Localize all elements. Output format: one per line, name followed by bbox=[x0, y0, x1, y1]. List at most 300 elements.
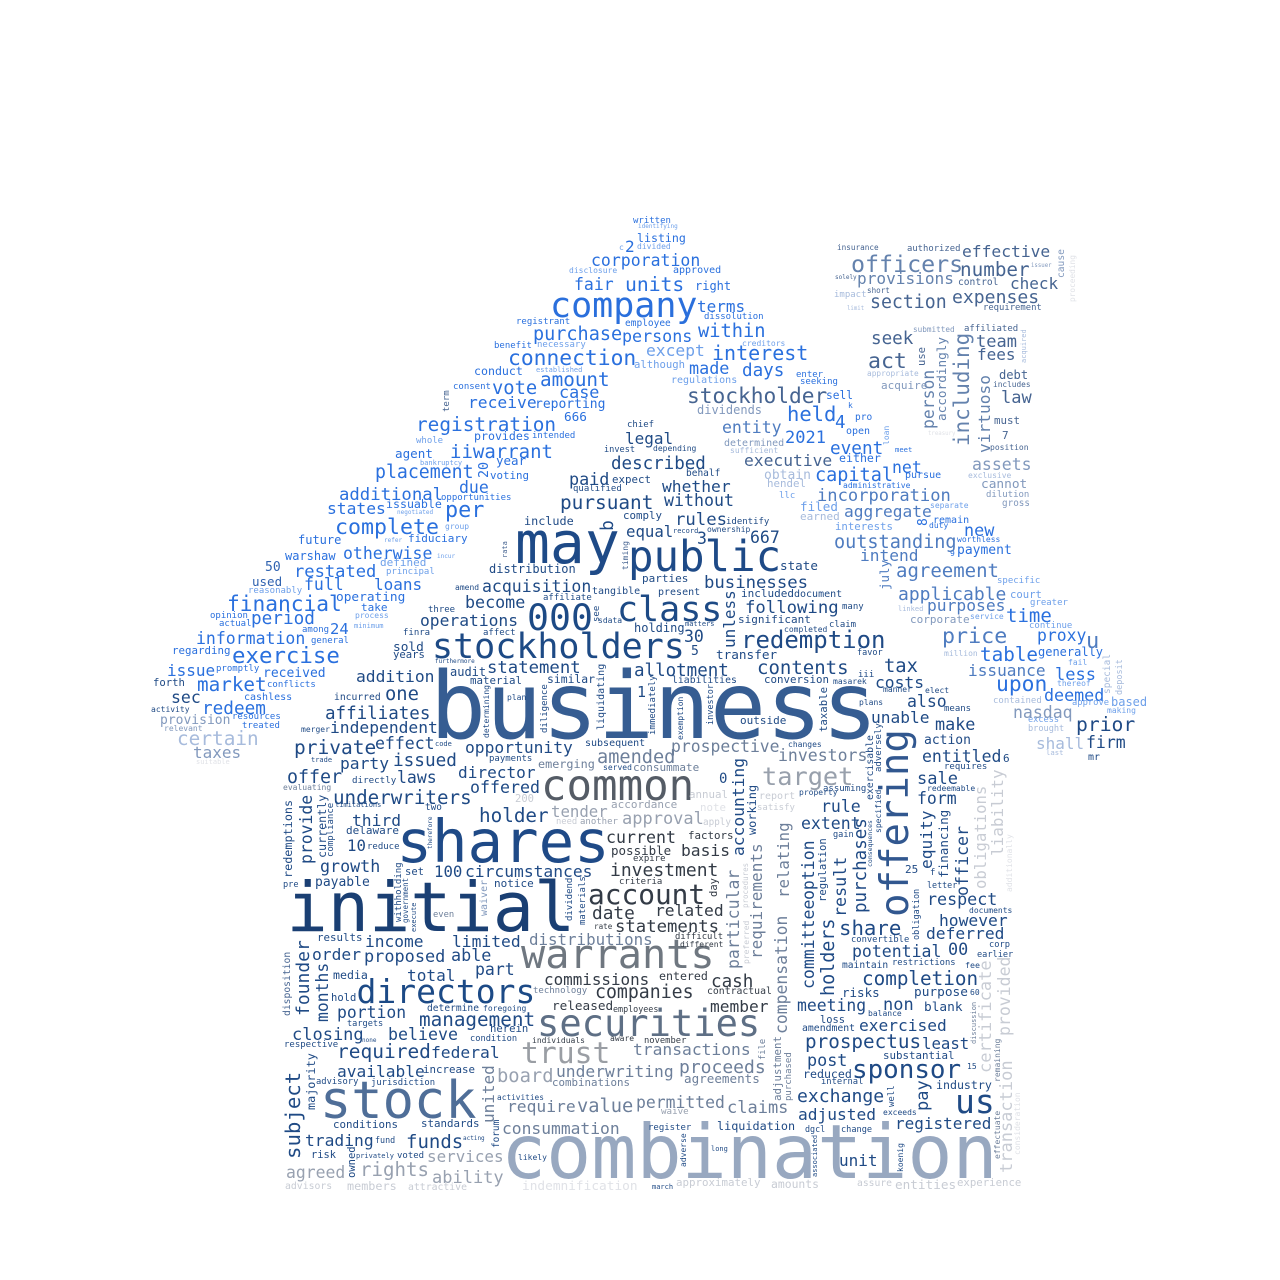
words: pale bright blue small terms: fail bbox=[1068, 658, 1087, 667]
words: bright blue roof left: connection bbox=[508, 346, 636, 371]
words: bright blue roof left: listing bbox=[637, 231, 686, 245]
words: navy centre and lower body: fund bbox=[375, 1135, 395, 1145]
words: top right block slate blue: use bbox=[916, 347, 928, 366]
words: navy centre and lower body: advisory bbox=[316, 1077, 358, 1087]
words: navy centre and lower body: non bbox=[883, 995, 914, 1015]
large word: common: common bbox=[541, 761, 694, 810]
words: slate light grey-blue: issuer bbox=[1031, 263, 1052, 269]
words: navy centre and lower body: financing bbox=[936, 810, 951, 878]
words: pale grey fringes: amounts bbox=[771, 1177, 819, 1191]
words: slate light grey-blue: assets bbox=[972, 455, 1032, 474]
words: navy centre and lower body: subsequent bbox=[585, 738, 645, 749]
words: bright blue roof left: open bbox=[846, 426, 870, 437]
words: pale grey fringes: obligations bbox=[972, 786, 990, 889]
words: navy centre and lower body: manner bbox=[883, 685, 912, 694]
words: bright blue roof left: among bbox=[302, 625, 329, 635]
words: bright blue roof left: operating bbox=[336, 590, 405, 605]
words: navy centre and lower body: portion bbox=[337, 1003, 406, 1022]
large word: offering: offering bbox=[873, 729, 918, 917]
words: navy centre and lower body: notice bbox=[494, 877, 534, 890]
words: navy centre and lower body: activities bbox=[497, 1093, 544, 1102]
words: navy centre and lower body: firm bbox=[1086, 733, 1126, 752]
words: bright blue roof left: voting bbox=[490, 469, 529, 482]
words: bright blue roof left: units bbox=[625, 273, 684, 296]
words: bright blue roof left: worthless bbox=[957, 535, 1001, 544]
words: navy centre and lower body: well bbox=[887, 1085, 897, 1107]
words: navy centre and lower body: majority bbox=[304, 1053, 318, 1110]
words: navy centre and lower body: 10 bbox=[347, 836, 366, 855]
words: navy centre and lower body: party bbox=[340, 754, 389, 773]
words: mid grey lower body: accordance bbox=[611, 798, 677, 811]
words: mid grey lower body: ability bbox=[432, 1168, 504, 1188]
words: pale bright blue small terms: excess bbox=[1028, 715, 1059, 725]
words: bright blue roof left: receive bbox=[468, 393, 537, 412]
words: bright blue roof left: event bbox=[830, 439, 883, 459]
large word: initial: initial bbox=[286, 868, 575, 948]
words: pale grey fringes: approximately bbox=[676, 1176, 761, 1189]
words: navy centre and lower body: balance bbox=[868, 1009, 902, 1018]
words: pale bright blue small terms: identifying bbox=[638, 223, 678, 230]
largest word: business: business bbox=[430, 652, 878, 760]
words: pale blue accents: sufficient bbox=[730, 446, 778, 455]
words: navy centre and lower body: immediately bbox=[648, 675, 658, 735]
words: top right block slate blue: position bbox=[990, 443, 1029, 452]
words: navy centre and lower body: pay bbox=[913, 1080, 933, 1111]
words: navy centre and lower body: adjusted bbox=[798, 1105, 876, 1124]
words: bright blue roof left: additional bbox=[339, 485, 443, 505]
words: navy centre and lower body: march bbox=[652, 1183, 673, 1191]
words: slate light grey-blue: gross bbox=[1002, 498, 1030, 509]
words: slate grey lower centre: combinations bbox=[552, 1076, 630, 1089]
words: pale blue accents: deposit bbox=[1115, 659, 1125, 695]
words: pale grey fringes: procedures bbox=[741, 863, 750, 908]
words: dark charcoal centre: basis bbox=[681, 841, 730, 860]
words: navy centre and lower body: record bbox=[673, 527, 698, 535]
words: bright blue roof left: take bbox=[361, 601, 388, 614]
words: pale bright blue small terms: refer bbox=[384, 537, 402, 544]
words: navy centre and lower body: none bbox=[362, 1037, 377, 1044]
words: right wing mid blue: issuance bbox=[968, 661, 1046, 680]
words: mid grey lower body: tender bbox=[551, 802, 608, 821]
words: navy centre and lower body: behalf bbox=[686, 468, 720, 479]
words: navy centre and lower body: growth bbox=[320, 856, 380, 876]
words: navy centre and lower body: internal bbox=[821, 1077, 863, 1087]
words: navy centre and lower body: circumstances bbox=[465, 862, 592, 881]
words: navy centre and lower body: potential bbox=[852, 942, 941, 961]
words: navy centre and lower body: 6 bbox=[1003, 752, 1010, 765]
words: top right block slate blue: seek bbox=[871, 329, 914, 349]
large word: stockholders: stockholders bbox=[432, 627, 685, 667]
words: slate grey lower centre: permitted bbox=[636, 1093, 725, 1112]
words: navy centre and lower body: plan bbox=[507, 693, 526, 702]
words: bright blue roof left: seeking bbox=[800, 377, 838, 387]
words: mid grey lower body: services bbox=[427, 1147, 504, 1166]
words: navy centre and lower body: affect bbox=[483, 628, 516, 638]
words: slate light grey-blue: provision bbox=[160, 713, 230, 728]
words: navy centre and lower body: f bbox=[930, 868, 935, 878]
words: navy centre and lower body: years bbox=[393, 649, 425, 661]
words: bright blue roof left: table bbox=[980, 643, 1038, 666]
words: navy centre and lower body: exemption bbox=[676, 696, 685, 740]
words: navy centre and lower body: documents bbox=[969, 906, 1013, 915]
words: navy centre and lower body: code bbox=[435, 740, 452, 748]
words: navy centre and lower body: expect bbox=[612, 473, 651, 486]
large word: directors: directors bbox=[356, 972, 535, 1011]
words: slate light grey-blue: determined bbox=[724, 438, 784, 449]
words: bright blue roof left: consent bbox=[453, 382, 491, 392]
words: slate grey lower centre: investors bbox=[778, 746, 867, 765]
words: bright blue roof left: 20 bbox=[477, 462, 492, 478]
words: navy centre and lower body: increase bbox=[423, 1063, 475, 1076]
words: pale bright blue small terms: minimum bbox=[354, 622, 384, 630]
words: pale blue accents: acquired bbox=[1020, 329, 1028, 363]
words: bright blue roof left: redeem bbox=[202, 699, 266, 719]
words: pale bright blue small terms: bankruptcy bbox=[420, 459, 462, 467]
large word: target: target bbox=[762, 762, 853, 791]
words: navy centre and lower body: liquidation bbox=[717, 1119, 795, 1133]
words: slate light grey-blue: acquire bbox=[881, 379, 927, 392]
words: navy centre and lower body: required bbox=[337, 1040, 431, 1063]
words: navy centre and lower body: make bbox=[935, 714, 975, 734]
words: bright blue roof left: pro bbox=[855, 412, 872, 423]
words: bright blue roof left: placement bbox=[375, 462, 474, 483]
words: top right block slate blue: must bbox=[994, 414, 1020, 427]
words: bright blue roof left: duty bbox=[929, 521, 948, 530]
words: slate light grey-blue: cause bbox=[1056, 249, 1067, 278]
words: bright blue roof left: terms bbox=[697, 297, 745, 316]
words: navy centre and lower body: furthermore bbox=[435, 658, 475, 665]
words: navy centre and lower body: fee bbox=[965, 960, 980, 970]
words: pale blue accents: appropriate bbox=[867, 369, 919, 378]
words: dark charcoal centre: individuals bbox=[532, 1036, 585, 1045]
words: pale blue accents: limit bbox=[847, 306, 864, 312]
words: dark charcoal centre: aware bbox=[610, 1034, 634, 1043]
words: bright blue roof left: time bbox=[1006, 605, 1052, 627]
words: navy centre and lower body: forth bbox=[153, 677, 185, 689]
words: navy centre and lower body: obligation bbox=[912, 889, 922, 940]
words: navy centre and lower body: include bbox=[524, 514, 574, 528]
words: right wing mid blue: aggregate bbox=[844, 502, 932, 521]
words: bright blue roof left: purchase bbox=[533, 324, 622, 345]
words: pale grey fringes: certificate bbox=[976, 960, 996, 1073]
words: pale bright blue small terms: defined bbox=[380, 556, 426, 569]
words: slate grey lower centre: effectuate bbox=[993, 1111, 1002, 1159]
words: slate grey lower centre: prospective bbox=[671, 737, 780, 756]
words: navy centre and lower body: affiliate bbox=[543, 593, 592, 603]
words: bright blue roof left: regarding bbox=[172, 644, 231, 657]
words: bright blue roof left: held bbox=[787, 402, 836, 426]
words: navy centre and lower body: risk bbox=[311, 1149, 337, 1161]
words: bright blue roof left: loans bbox=[374, 575, 422, 594]
words: navy centre and lower body: elect bbox=[925, 686, 949, 695]
words: navy centre and lower body: action bbox=[924, 733, 971, 748]
words: right wing mid blue: purposes bbox=[927, 596, 1005, 615]
words: navy centre and lower body: however bbox=[939, 911, 1008, 930]
words: pale bright blue small terms: group bbox=[445, 522, 469, 531]
words: navy centre and lower body: accounting bbox=[729, 758, 748, 856]
words: navy centre and lower body: proposed bbox=[364, 946, 445, 966]
words: navy centre and lower body: change bbox=[841, 1125, 872, 1135]
words: navy centre and lower body: trading bbox=[305, 1131, 374, 1150]
words: navy centre and lower body: likely bbox=[518, 1153, 547, 1162]
words: navy centre and lower body: post bbox=[807, 1050, 847, 1070]
words: faintest fringe: proceeding bbox=[1068, 255, 1077, 302]
words: navy centre and lower body: founder bbox=[293, 940, 314, 1016]
words: navy centre and lower body: convertible bbox=[851, 935, 909, 945]
words: navy centre and lower body: 0 bbox=[719, 771, 727, 787]
words: bright blue roof left: either bbox=[839, 451, 881, 465]
words: faintest fringe bbox=[196, 255, 1077, 1194]
words: mid grey lower body: rights bbox=[360, 1158, 429, 1181]
words: bright blue roof left: provides bbox=[474, 429, 530, 443]
words: navy centre and lower body: statement bbox=[487, 658, 581, 678]
words: faintest fringe: note bbox=[700, 801, 726, 814]
words: slate grey lower centre: evaluating bbox=[283, 783, 331, 792]
words: navy centre and lower body: conversion bbox=[764, 673, 829, 686]
words: pale grey fringes: entities bbox=[895, 1177, 956, 1192]
words: navy centre and lower body: conditions bbox=[333, 1118, 398, 1131]
words: pale grey fringes: advisors bbox=[285, 1181, 332, 1192]
words: navy centre and lower body: pre bbox=[283, 880, 299, 890]
words: pale bright blue small terms: thereof bbox=[1057, 679, 1091, 688]
words: pale blue accents: linked bbox=[898, 605, 923, 613]
words: navy centre and lower body: form bbox=[917, 789, 957, 808]
words: navy centre and lower body bbox=[151, 420, 1135, 1191]
words: bright blue roof left: persons bbox=[622, 326, 692, 346]
words: pale bright blue small terms: principal bbox=[386, 567, 435, 577]
words: navy centre and lower body: one bbox=[385, 684, 419, 705]
words: dark charcoal centre: current bbox=[606, 828, 676, 847]
words: navy centre and lower body: contents bbox=[757, 657, 849, 679]
words: navy centre and lower body: restrictions bbox=[892, 958, 956, 968]
words: navy centre and lower body: herein bbox=[490, 1023, 528, 1035]
words: bright blue roof left: information bbox=[196, 629, 305, 648]
words: navy centre and lower body: outside bbox=[740, 714, 786, 727]
words: navy centre and lower body: amendment bbox=[802, 1023, 855, 1034]
words: pale grey fringes: attractive bbox=[408, 1182, 467, 1193]
words: bright blue roof left: written bbox=[633, 216, 671, 226]
words: navy centre and lower body: whether bbox=[662, 477, 731, 496]
large word: account: account bbox=[588, 878, 705, 911]
words: bright blue roof left: future bbox=[298, 533, 341, 547]
words: bright blue roof left: deemed bbox=[1044, 685, 1104, 705]
words: dark charcoal centre: cash bbox=[711, 972, 753, 992]
words: slate grey lower centre bbox=[283, 737, 1002, 1159]
words: navy centre and lower body: funds bbox=[406, 1131, 463, 1153]
words: navy centre and lower body: finra bbox=[403, 628, 430, 638]
words: pale bright blue small terms: reasonably bbox=[248, 586, 303, 596]
words: pale bright blue small terms: based bbox=[1111, 695, 1147, 709]
large word: 000: 000 bbox=[527, 596, 593, 639]
words: navy centre and lower body: payable bbox=[315, 875, 370, 890]
words: dark charcoal centre: expire bbox=[633, 854, 666, 864]
words: pale blue accents: impact bbox=[834, 290, 867, 300]
words: pale blue accents: special bbox=[1102, 654, 1113, 694]
words: bright blue roof left: otherwise bbox=[343, 544, 432, 563]
words: navy centre and lower body: property bbox=[799, 788, 838, 797]
words: navy centre and lower body: determine bbox=[427, 1003, 479, 1014]
words: bright blue roof left: interest bbox=[712, 341, 808, 365]
words: navy centre and lower body: corp bbox=[989, 940, 1010, 950]
words: navy centre and lower body: result bbox=[830, 857, 850, 917]
words: top right block slate blue: effective bbox=[962, 242, 1050, 261]
words: pale grey fringes: need bbox=[556, 817, 577, 827]
words: navy centre and lower body: become bbox=[465, 592, 525, 612]
words: bright blue roof left: 2021 bbox=[785, 428, 826, 448]
words: top right block slate blue: authorized bbox=[907, 244, 960, 254]
words: pale bright blue small terms: except bbox=[646, 341, 705, 360]
words: slate light grey-blue: relevant bbox=[164, 724, 203, 733]
words: top right block slate blue bbox=[282, 242, 1059, 1016]
words: top right block slate blue: short bbox=[867, 286, 890, 295]
words: navy centre and lower body: prior bbox=[1076, 713, 1135, 736]
words: navy centre and lower body: currently bbox=[315, 795, 329, 858]
words: navy centre and lower body: owned bbox=[346, 1146, 358, 1178]
large word: class: class bbox=[617, 590, 722, 630]
words: navy centre and lower body: present bbox=[658, 587, 700, 598]
words: navy centre and lower body: assuming bbox=[823, 784, 866, 794]
words: navy centre and lower body: consequences bbox=[866, 820, 874, 867]
words: slate grey lower centre: compensation bbox=[772, 916, 791, 1034]
words: slate grey lower centre: emerging bbox=[538, 757, 595, 771]
words: navy centre and lower body: document bbox=[794, 589, 842, 600]
words: navy centre and lower body: register bbox=[648, 1123, 692, 1133]
words: navy centre and lower body: holding bbox=[634, 621, 685, 635]
words: mid grey lower body: waive bbox=[661, 1106, 689, 1117]
words: navy centre and lower body: extent bbox=[801, 814, 861, 833]
words: top right block slate blue: stockholder bbox=[687, 383, 827, 408]
words: navy centre and lower body: income bbox=[365, 932, 423, 951]
words: top right block slate blue: 7 bbox=[1002, 429, 1009, 442]
words: top right block slate blue: disposition bbox=[282, 952, 293, 1016]
words: navy centre and lower body: offered bbox=[470, 778, 540, 797]
words: pale bright blue small terms: necessary bbox=[537, 340, 586, 350]
words: right wing mid blue: incorporation bbox=[817, 486, 951, 506]
words: navy centre and lower body: reduced bbox=[803, 1067, 852, 1081]
words: top right block slate blue: executive bbox=[744, 451, 832, 470]
words: navy centre and lower body: dgcl bbox=[805, 1124, 825, 1134]
words: mid blue roof margin: used bbox=[252, 574, 282, 589]
words: pale bright blue small terms: court bbox=[1010, 589, 1042, 601]
words: navy centre and lower body: jurisdiction bbox=[371, 1078, 435, 1088]
words: dark charcoal centre: companies bbox=[595, 982, 694, 1003]
words: navy centre and lower body: working bbox=[745, 785, 759, 835]
words: navy centre and lower body: delaware bbox=[346, 824, 399, 837]
words: bright blue roof left: intended bbox=[532, 431, 575, 441]
words: pale bright blue small terms: negotiated bbox=[397, 509, 434, 516]
words: navy centre and lower body: months bbox=[313, 963, 332, 1022]
words: pale blue accents: certain bbox=[177, 727, 259, 750]
words: dark charcoal centre: statements bbox=[615, 917, 719, 937]
words: navy centre and lower body: management bbox=[419, 1008, 535, 1031]
words: pale bright blue small terms: disclosure bbox=[569, 266, 617, 275]
words: navy centre and lower body: substantial bbox=[883, 1049, 955, 1062]
words: right wing mid blue: u bbox=[1086, 629, 1099, 654]
words: navy centre and lower body: liquidating bbox=[596, 664, 607, 730]
words: top right block slate blue: affiliated bbox=[964, 324, 1018, 334]
words: pale bright blue small terms: specific bbox=[997, 576, 1040, 586]
words: pale bright blue small terms: whole bbox=[416, 436, 443, 446]
words: navy centre and lower body: tangible bbox=[592, 586, 640, 597]
words: navy centre and lower body: completion bbox=[862, 967, 978, 990]
words: navy centre and lower body: claim bbox=[829, 620, 856, 630]
large word: may: may bbox=[515, 509, 620, 577]
words: navy centre and lower body: activity bbox=[151, 705, 190, 714]
words: navy centre and lower body: maintain bbox=[842, 960, 888, 971]
words: slate light grey-blue: cannot bbox=[981, 477, 1027, 492]
large word: sponsor: sponsor bbox=[852, 1055, 961, 1085]
words: navy centre and lower body: served bbox=[603, 763, 632, 772]
words: pale bright blue small terms: established bbox=[536, 366, 582, 374]
words: bright blue roof left: 666 bbox=[564, 409, 587, 424]
words: navy centre and lower body: officer bbox=[953, 826, 972, 896]
words: top right block slate blue: expenses bbox=[952, 287, 1039, 308]
words: bright blue roof left: meet bbox=[895, 445, 912, 454]
words: bright blue roof left: benefit bbox=[494, 341, 532, 351]
words: pale bright blue small terms: continue bbox=[1029, 621, 1072, 631]
words: right wing mid blue: intend bbox=[860, 546, 918, 565]
words: pale bright blue small terms: filed bbox=[800, 499, 838, 514]
words: navy centre and lower body: changes bbox=[788, 740, 822, 749]
large word: public: public bbox=[628, 532, 781, 581]
large word: company: company bbox=[550, 286, 698, 326]
words: navy centre and lower body: sec bbox=[171, 688, 201, 707]
words: mid grey lower body: approval bbox=[622, 809, 704, 829]
words: navy centre and lower body: set bbox=[405, 866, 424, 878]
words: top right block slate blue: act bbox=[868, 349, 907, 374]
words: navy centre and lower body: iii bbox=[858, 670, 874, 680]
words: bright blue roof left: net bbox=[892, 458, 922, 477]
words: bright blue roof left: opinion bbox=[210, 611, 248, 621]
words: navy centre and lower body: part bbox=[475, 960, 515, 979]
words: bright blue roof left: 4 bbox=[835, 413, 846, 433]
words: pale bright blue small terms: creditors bbox=[742, 339, 786, 348]
words: bright blue roof left: states bbox=[327, 499, 386, 518]
words: bright blue roof left: reporting bbox=[535, 397, 605, 412]
words: navy centre and lower body: issued bbox=[393, 751, 457, 771]
words: navy centre and lower body: ownership bbox=[707, 525, 751, 534]
words: slate grey lower centre: claims bbox=[727, 1098, 788, 1118]
words: navy centre and lower body: specified bbox=[874, 789, 883, 833]
words: pale grey fringes: 200 bbox=[515, 793, 534, 805]
words: navy centre and lower body: dividend bbox=[565, 878, 575, 921]
words: navy centre and lower body: closing bbox=[292, 1025, 364, 1045]
words: navy centre and lower body: merger bbox=[301, 725, 330, 734]
words: right wing mid blue: price bbox=[942, 624, 1007, 649]
words: bright blue roof left: promptly bbox=[216, 664, 260, 674]
words: navy centre and lower body: gain bbox=[833, 830, 854, 840]
words: top right block slate blue: term bbox=[442, 390, 452, 412]
words: navy centre and lower body: parties bbox=[642, 572, 688, 585]
words: navy centre and lower body: hold bbox=[331, 992, 356, 1004]
words: navy centre and lower body: purpose bbox=[914, 985, 968, 1000]
words: right wing mid blue: agreement bbox=[896, 560, 999, 582]
words: navy centre and lower body: 30 bbox=[684, 627, 704, 646]
words: navy centre and lower body: following bbox=[745, 598, 839, 618]
words: pale grey fringes: liability bbox=[988, 769, 1007, 856]
words: navy centre and lower body: least bbox=[922, 1034, 969, 1053]
large word: stock: stock bbox=[320, 1071, 477, 1131]
words: dark charcoal centre: factors bbox=[688, 829, 734, 842]
words: navy centre and lower body: exercisable bbox=[865, 735, 876, 800]
words: navy centre and lower body: transfer bbox=[716, 647, 777, 662]
words: bright blue roof left: general bbox=[311, 636, 349, 646]
words: bright blue roof left: full bbox=[304, 575, 344, 594]
words: navy centre and lower body: 25 bbox=[905, 863, 918, 876]
words: bright blue roof left: registrant bbox=[516, 317, 570, 327]
words: pale grey fringes: provided bbox=[995, 957, 1014, 1036]
words: dark charcoal centre: possible bbox=[611, 843, 671, 858]
